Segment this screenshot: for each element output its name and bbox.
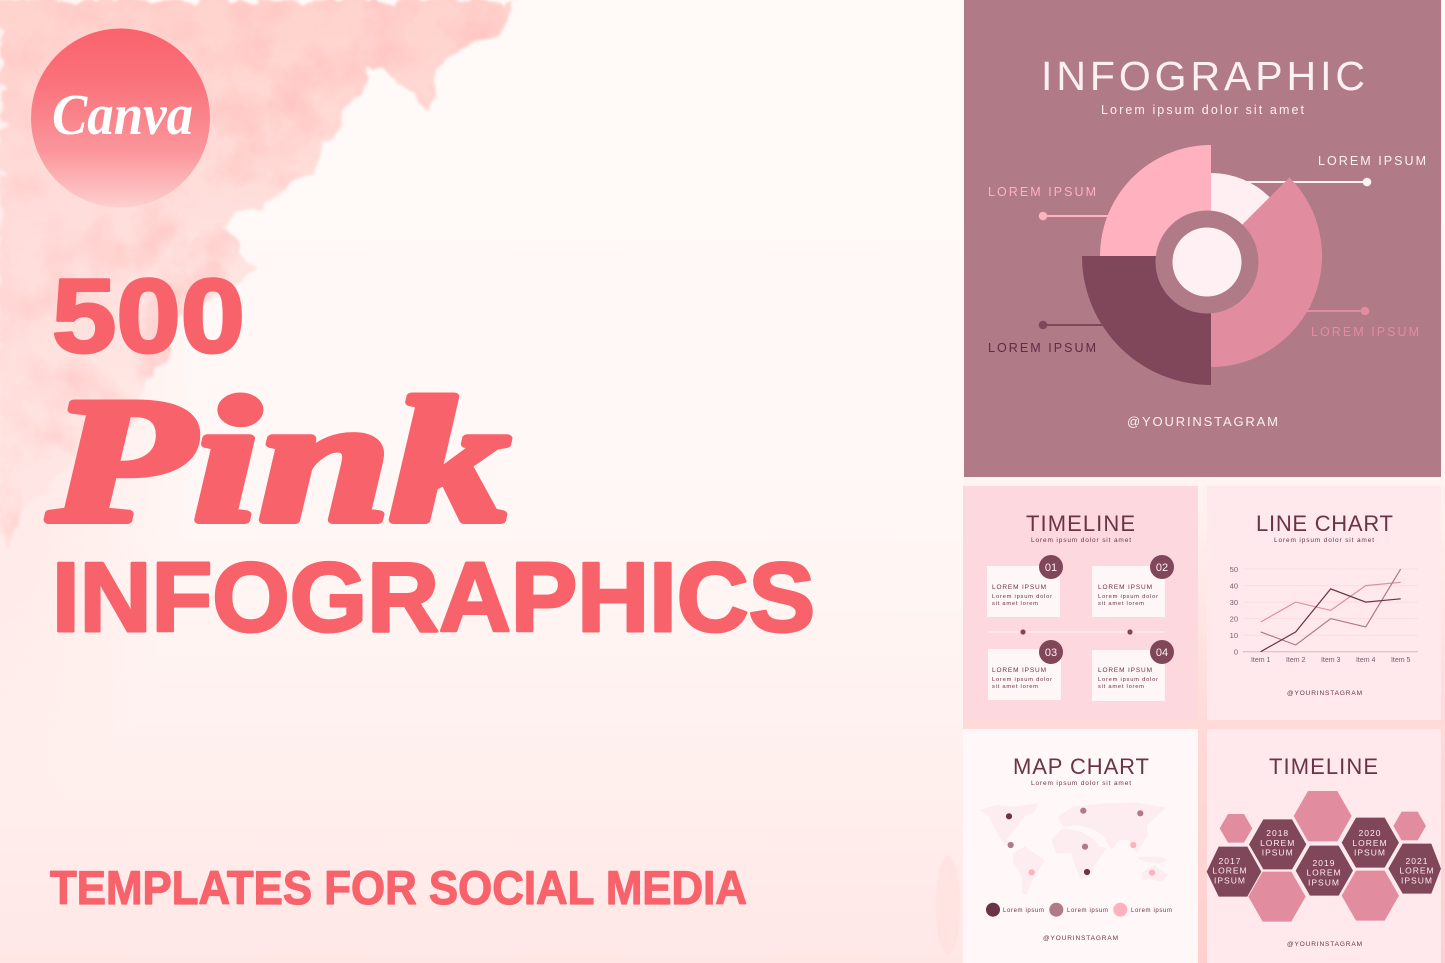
pink hexagons — [1220, 791, 1426, 922]
panel: timeline cards — [963, 486, 1198, 720]
callout line: left — [1039, 212, 1110, 220]
handle: @YOURINSTAGRAM — [1287, 690, 1362, 697]
pie segment: medium pink — [1211, 178, 1322, 367]
card 01: LOREM IPSUM — [992, 584, 1046, 591]
dark hexagons — [1207, 818, 1441, 897]
panel subtitle: Lorem ipsum dolor sit amet — [1274, 537, 1374, 544]
panel title: MAP CHART — [1013, 754, 1149, 779]
gutter between thumbnails — [963, 477, 1445, 963]
hexagon labels: 2017 — [1219, 856, 1241, 866]
card 03 — [988, 640, 1063, 700]
handle: @YOURINSTAGRAM — [1043, 935, 1118, 942]
card 02: 02 — [1156, 562, 1168, 574]
hexagon labels: IPSUM — [1308, 877, 1340, 887]
label: top right: LOREM IPSUM — [1318, 154, 1426, 168]
heading: Pink: Pink — [48, 361, 509, 559]
panel title: TIMELINE — [1026, 511, 1135, 536]
card 03: sit amet lorem — [992, 684, 1038, 690]
watercolor stain: bottom right corner — [936, 855, 960, 955]
canva logo badge — [31, 28, 210, 208]
map legend: Lorem ipsum — [1131, 908, 1172, 914]
card 02 — [1092, 555, 1174, 617]
donut centre — [1156, 210, 1258, 314]
card 03: Lorem ipsum dolor — [992, 677, 1052, 683]
pie segment: pale — [1211, 173, 1270, 256]
pie segment: dark — [1082, 256, 1211, 385]
map legend: Lorem ipsum — [1003, 908, 1044, 914]
card 04: sit amet lorem — [1098, 684, 1144, 690]
panel title: INFOGRAPHIC — [1041, 53, 1365, 99]
line chart: 50 — [1230, 565, 1238, 574]
line chart: 40 — [1230, 582, 1238, 590]
handle: @YOURINSTAGRAM — [1287, 941, 1362, 948]
label: bottom left: LOREM IPSUM — [988, 341, 1096, 355]
watercolor stain: top left — [0, 0, 515, 550]
world map — [980, 802, 1168, 895]
line chart: Item 2 — [1286, 657, 1306, 664]
panel: infographic donut — [964, 0, 1441, 477]
panel subtitle: Lorem ipsum dolor sit amet — [1031, 537, 1131, 544]
canva logo badge: Canva — [52, 82, 193, 147]
hexagon labels: LOREM — [1399, 866, 1435, 876]
line chart — [1230, 565, 1418, 664]
card 01: sit amet lorem — [992, 601, 1038, 607]
label: bottom right: LOREM IPSUM — [1311, 325, 1419, 339]
callout line: bottom left — [1039, 321, 1105, 329]
hexagon labels: IPSUM — [1401, 875, 1433, 885]
panel title: LINE CHART — [1256, 511, 1393, 536]
hexagon labels: 2021 — [1406, 856, 1428, 866]
label: left: LOREM IPSUM — [988, 185, 1096, 199]
card 02: Lorem ipsum dolor — [1098, 594, 1158, 600]
line chart: 30 — [1230, 598, 1238, 607]
hexagon labels: IPSUM — [1354, 848, 1386, 858]
hexagon labels: IPSUM — [1214, 875, 1246, 885]
card 04: LOREM IPSUM — [1098, 667, 1152, 674]
card 01: 01 — [1045, 562, 1057, 574]
card 04: Lorem ipsum dolor — [1098, 677, 1158, 683]
callout line: top right — [1245, 178, 1371, 186]
line chart: 20 — [1230, 614, 1238, 624]
card 03: 03 — [1045, 647, 1057, 659]
panel subtitle: Lorem ipsum dolor sit amet — [1101, 103, 1305, 117]
panel: map chart — [963, 729, 1198, 963]
card 03: LOREM IPSUM — [992, 667, 1046, 674]
hexagon labels — [1212, 828, 1435, 887]
card 02: LOREM IPSUM — [1098, 584, 1152, 591]
card 01: Lorem ipsum dolor — [992, 594, 1052, 600]
hexagon labels: 2020 — [1359, 828, 1381, 838]
hexagon labels: 2018 — [1266, 828, 1289, 838]
hexagon labels: LOREM — [1260, 838, 1295, 848]
map legend — [986, 903, 1172, 917]
hexagon labels: 2019 — [1313, 858, 1335, 868]
line chart: Item 5 — [1391, 657, 1411, 664]
line chart: 10 — [1230, 631, 1238, 640]
card 01 — [987, 555, 1063, 617]
line chart: 0 — [1234, 648, 1238, 656]
hexagon labels: LOREM — [1352, 838, 1388, 848]
divider line with dots — [988, 629, 1165, 635]
heading: INFOGRAPHICS: INFOGRAPHICS — [52, 542, 815, 652]
panel: line chart — [1207, 486, 1441, 720]
card 02: sit amet lorem — [1098, 601, 1144, 607]
card 04 — [1092, 640, 1174, 701]
panel subtitle: Lorem ipsum dolor sit amet — [1031, 780, 1131, 787]
panel: hexagon timeline — [1207, 729, 1441, 963]
pie segment: light pink — [1100, 145, 1211, 256]
subheading: templates for social media: TEMPLATES FOR SOCIAL MEDIA — [50, 861, 747, 914]
handle: @YOURINSTAGRAM — [1127, 414, 1278, 429]
map markers — [1006, 808, 1155, 876]
line chart: Item 3 — [1321, 657, 1341, 664]
hexagon labels: LOREM — [1306, 868, 1342, 878]
heading: 500: 500 — [52, 258, 245, 375]
hexagon labels: IPSUM — [1262, 848, 1294, 858]
callout line: bottom right — [1305, 307, 1369, 315]
line chart: Item 1 — [1251, 657, 1271, 664]
card 04: 04 — [1156, 647, 1168, 659]
hexagon labels: LOREM — [1212, 866, 1248, 876]
panel title: TIMELINE — [1269, 754, 1378, 779]
watercolor stain: left edge fade — [0, 0, 330, 800]
line chart: Item 4 — [1356, 657, 1376, 664]
map legend: Lorem ipsum — [1067, 908, 1108, 914]
